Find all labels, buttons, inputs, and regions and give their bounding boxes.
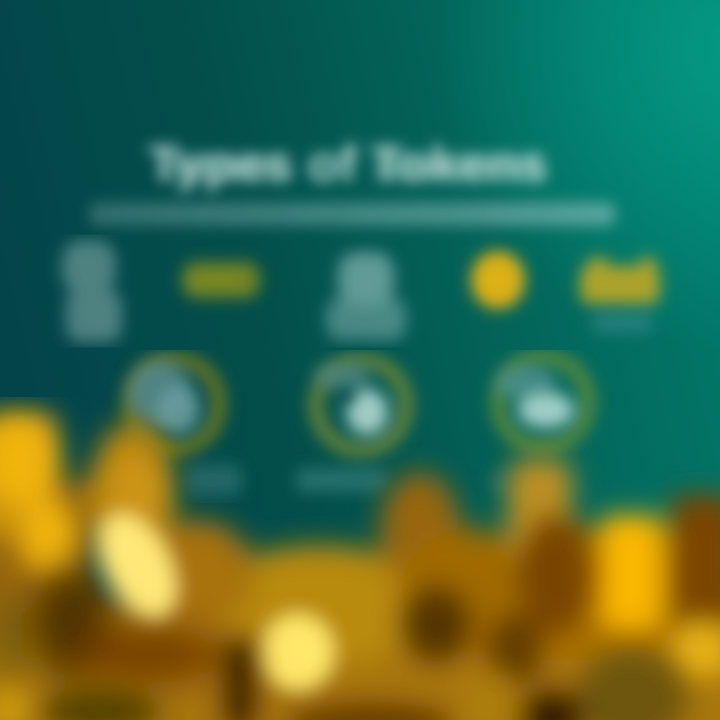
caption left xyxy=(186,464,242,496)
label: olive token xyxy=(182,262,260,298)
coin: dark brown middle xyxy=(402,515,591,686)
top row icons xyxy=(62,240,660,342)
coin: dark shadow left xyxy=(0,569,225,683)
caption centre xyxy=(296,468,388,492)
icon: circle centre xyxy=(315,360,406,450)
coin: highlight left xyxy=(83,501,193,629)
bottom row circular icons xyxy=(128,357,588,496)
subtitle: Understanding the main categories of digital assets xyxy=(87,200,617,228)
coin: bottom shadows xyxy=(0,640,584,720)
coin: right bright column xyxy=(600,495,720,678)
icon: centre pale column xyxy=(326,252,406,340)
icon: circle right xyxy=(496,357,588,447)
icon: circle left xyxy=(128,359,219,449)
caption under gold token xyxy=(592,314,652,332)
icon: left pale column xyxy=(62,240,122,342)
icon: gold coin xyxy=(471,251,525,309)
coin: highlight centre xyxy=(262,614,334,690)
coin: olive lower right xyxy=(576,648,688,720)
coins base mass xyxy=(0,415,720,720)
coin: tall gold left xyxy=(0,414,162,576)
caption right xyxy=(490,470,514,494)
title: Types of Tokens xyxy=(148,136,548,192)
label: gold token xyxy=(580,258,660,304)
label: olive token: ERC xyxy=(191,265,251,296)
gold coins foreground xyxy=(0,414,720,720)
